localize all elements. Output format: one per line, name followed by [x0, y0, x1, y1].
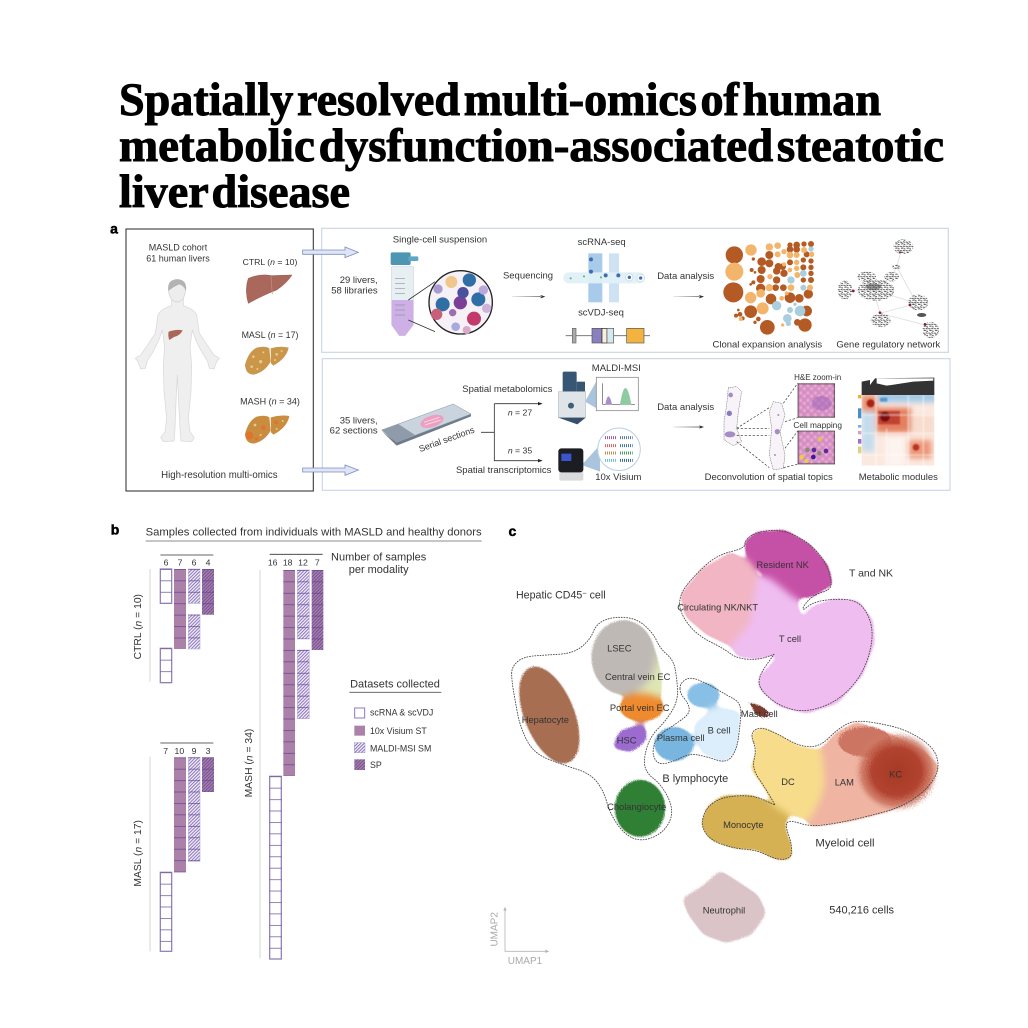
- icon: MALDI-MSI instrument and spectrum: MALDI-MSI: [592, 363, 641, 374]
- legend: datasets collected: SP: [370, 760, 382, 770]
- Neutrophil cluster: Neutrophil: [703, 906, 745, 916]
- MASL waffle chart: 7: [163, 746, 168, 756]
- panel: single-cell workflow: 58 libraries: [331, 285, 378, 296]
- panel: spatial workflow: n = 35: [508, 445, 532, 455]
- legend: datasets collected: [349, 678, 441, 770]
- MASH waffle chart: 16: [268, 558, 278, 568]
- CTRL liver group: CTRL (n = 10): [243, 257, 297, 267]
- bracket with arrows: [481, 402, 543, 462]
- MASH waffle chart: 18: [283, 558, 293, 568]
- Hepatic CD45- cluster: LSEC: [607, 643, 632, 653]
- cell mapping image: Cell mapping: [793, 420, 842, 430]
- Neutrophil cluster: [682, 870, 767, 943]
- panel: single-cell workflow: [322, 228, 948, 352]
- panel: single-cell workflow: Single-cell suspension: [393, 234, 487, 245]
- chart: metabolic module heatmap: [858, 378, 937, 467]
- Myeloid cluster: KC: [889, 769, 902, 779]
- Hepatic CD45- cluster: Cholangiocyte: [607, 802, 666, 812]
- CTRL waffle chart: 6: [192, 558, 197, 568]
- chart: gene regulatory network: [838, 239, 939, 338]
- panel: spatial workflow: Serial sections: [417, 424, 476, 454]
- panel: spatial workflow: 62 sections: [330, 425, 378, 436]
- panel: spatial workflow: [322, 359, 950, 490]
- figure: deconvolution of spatial topics: [724, 373, 842, 470]
- legend: datasets collected: scRNA & scVDJ: [370, 708, 433, 718]
- MASH liver group: MASH (n = 34): [240, 397, 300, 407]
- CTRL waffle chart: CTRL (n = 10): [133, 594, 144, 659]
- Myeloid cluster: DC: [781, 777, 795, 787]
- cohort box: 61 human livers: [146, 253, 210, 263]
- MASL liver group: [242, 330, 298, 374]
- panel: single-cell workflow: Gene regulatory network: [836, 339, 941, 350]
- Hepatic CD45- cluster: Hepatic CD45: [516, 590, 582, 602]
- MASL waffle chart: 9: [192, 746, 197, 756]
- panel: spatial workflow: Spatial transcriptomics: [456, 465, 552, 476]
- arrow to spatial panel: [303, 465, 358, 475]
- panel: single-cell workflow: Clonal expansion analysis: [712, 339, 822, 350]
- panel label a: a: [110, 221, 118, 237]
- panel: spatial workflow: n = 27: [508, 407, 532, 417]
- heading b: Samples collected from individuals with MASLD and healthy donors: [146, 527, 482, 539]
- number of samples note: Number of samples: [331, 551, 427, 563]
- legend: datasets collected: MALDI-MSI SM: [370, 744, 431, 754]
- panel: single-cell workflow: scRNA-seq: [578, 237, 626, 248]
- panel label c: c: [508, 523, 516, 539]
- panel a: study overview: [110, 221, 950, 491]
- legend: datasets collected: 10x Visium ST: [370, 726, 427, 736]
- MASL waffle chart: [133, 743, 214, 951]
- Hepatic CD45- cluster: Central vein EC: [605, 672, 671, 682]
- CTRL waffle chart: [133, 555, 214, 683]
- T and NK cluster: Resident NK: [756, 560, 810, 570]
- cell count: 540,216 cells: [829, 904, 895, 916]
- T and NK cluster: T cell: [779, 634, 801, 644]
- icon: tissue slide: [382, 404, 471, 446]
- panel: spatial workflow: Data analysis: [657, 402, 714, 413]
- Myeloid cluster: Monocyte: [723, 820, 764, 830]
- cohort box: [126, 229, 313, 491]
- number of samples note: per modality: [349, 564, 409, 576]
- UMAP axes: [489, 907, 549, 967]
- CTRL waffle chart: 6: [164, 558, 169, 568]
- icon: MALDI-MSI instrument and spectrum: [558, 363, 641, 424]
- human body figure: [135, 279, 219, 442]
- panel: single-cell workflow: 29 livers,: [340, 275, 378, 286]
- Hepatic CD45- cluster: HSC: [617, 735, 637, 745]
- legend: datasets collected: Datasets collected: [350, 678, 440, 690]
- panel c: UMAP: [489, 523, 940, 967]
- Mast cell cluster: [741, 703, 778, 719]
- chart: clonal expansion bubbles: [723, 241, 814, 335]
- Myeloid cluster: [701, 721, 940, 860]
- number of samples note: [331, 551, 427, 576]
- H&E zoom-in image: H&E zoom-in: [794, 373, 841, 382]
- B lymphocyte cluster: B cell: [708, 725, 730, 735]
- arrow: data analysis top: [673, 295, 704, 298]
- MASH waffle chart: 7: [315, 558, 320, 568]
- Hepatic CD45- cluster: −: [582, 588, 587, 597]
- B lymphocyte cluster: Plasma cell: [657, 733, 705, 743]
- panel: spatial workflow: Deconvolution of spatial topics: [705, 472, 833, 483]
- B lymphocyte cluster: [653, 678, 741, 785]
- icon: 10x Visium instrument and probes: 10x Visium: [595, 472, 642, 483]
- MASL liver group: MASL (n = 17): [242, 330, 298, 340]
- cohort box: MASLD cohort: [149, 242, 208, 252]
- icon: microfluidic chip: [563, 253, 645, 302]
- title: metabolic dysfunction-associated steatotic: [119, 120, 944, 172]
- Hepatic CD45- cluster: [507, 588, 678, 840]
- MASL waffle chart: MASL (n = 17): [133, 820, 144, 887]
- T and NK cluster: [677, 529, 893, 714]
- Myeloid cluster: LAM: [835, 778, 854, 788]
- icon: 10x Visium instrument and probes: [558, 428, 642, 483]
- panel: single-cell workflow: Sequencing: [503, 270, 553, 281]
- panel: single-cell workflow: Data analysis: [657, 271, 714, 282]
- T and NK cluster: Circulating NK/NKT: [677, 602, 758, 612]
- MASH waffle chart: 12: [298, 558, 308, 568]
- CTRL waffle chart: 4: [206, 558, 211, 568]
- cohort box: High-resolution multi-omics: [161, 470, 278, 481]
- title: Spatially resolved multi-omics of human: [119, 74, 881, 126]
- panel: spatial workflow: Spatial metabolomics: [462, 384, 553, 395]
- title: [119, 74, 944, 218]
- Mast cell cluster: Mast cell: [741, 709, 778, 719]
- Hepatic CD45- cluster: Hepatocyte: [522, 715, 569, 725]
- MASH waffle chart: [244, 554, 323, 959]
- panel b: samples per modality: [111, 522, 482, 959]
- MASL waffle chart: 3: [206, 746, 211, 756]
- icon: VDJ gene construct: [566, 328, 650, 343]
- panel: spatial workflow: Metabolic modules: [859, 472, 938, 483]
- Hepatic CD45- cluster: Portal vein EC: [610, 703, 670, 713]
- Hepatic CD45- cluster: cell: [587, 590, 606, 602]
- panel: spatial workflow: 35 livers,: [340, 415, 378, 426]
- panel label b: b: [111, 522, 119, 538]
- panel: single-cell workflow: scVDJ-seq: [578, 307, 624, 318]
- UMAP axes: UMAP2: [489, 912, 500, 947]
- MASL waffle chart: 10: [175, 746, 184, 756]
- UMAP axes: UMAP1: [508, 956, 543, 967]
- arrow to single-cell panel: [303, 247, 358, 258]
- title: liver disease: [119, 166, 350, 218]
- T and NK cluster: T and NK: [849, 568, 893, 579]
- MASH liver group: [240, 397, 300, 443]
- CTRL waffle chart: 7: [178, 558, 183, 568]
- Myeloid cluster: Myeloid cell: [815, 838, 875, 850]
- icon: tube with cell suspension: [391, 252, 492, 336]
- B lymphocyte cluster: B lymphocyte: [662, 773, 728, 785]
- arrow: sequencing: [512, 295, 545, 298]
- arrow: data analysis bottom: [673, 425, 704, 429]
- MASH waffle chart: MASH (n = 34): [244, 729, 255, 797]
- CTRL liver group: [243, 257, 297, 303]
